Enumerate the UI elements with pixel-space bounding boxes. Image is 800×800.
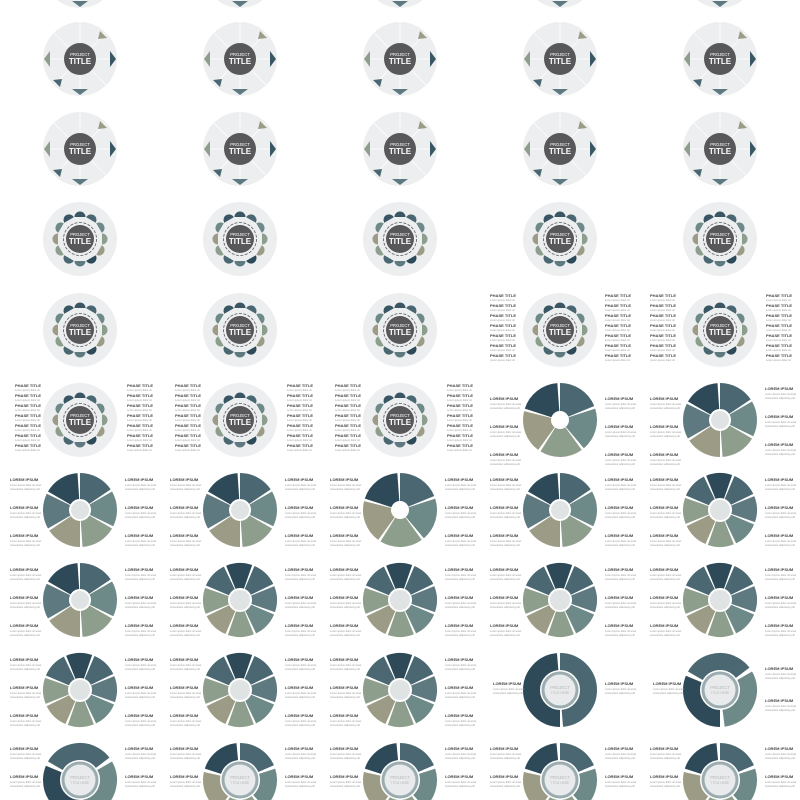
row 8: colour wheels and rings [10,651,797,729]
row 4: half-moon wheels with phase labels [43,293,792,367]
row 7: colour wheels with hub [10,567,797,637]
row 1: project title wheels [43,22,757,96]
row 5: half-moon wheels and first colour wheels [15,383,797,466]
row 2: project title wheels [43,112,757,186]
row 6: colour wheels [10,477,797,547]
row 9: project title rings [10,740,797,800]
row 0: partial diagrams [43,0,757,8]
row 3: half-moon wheels [43,202,757,276]
